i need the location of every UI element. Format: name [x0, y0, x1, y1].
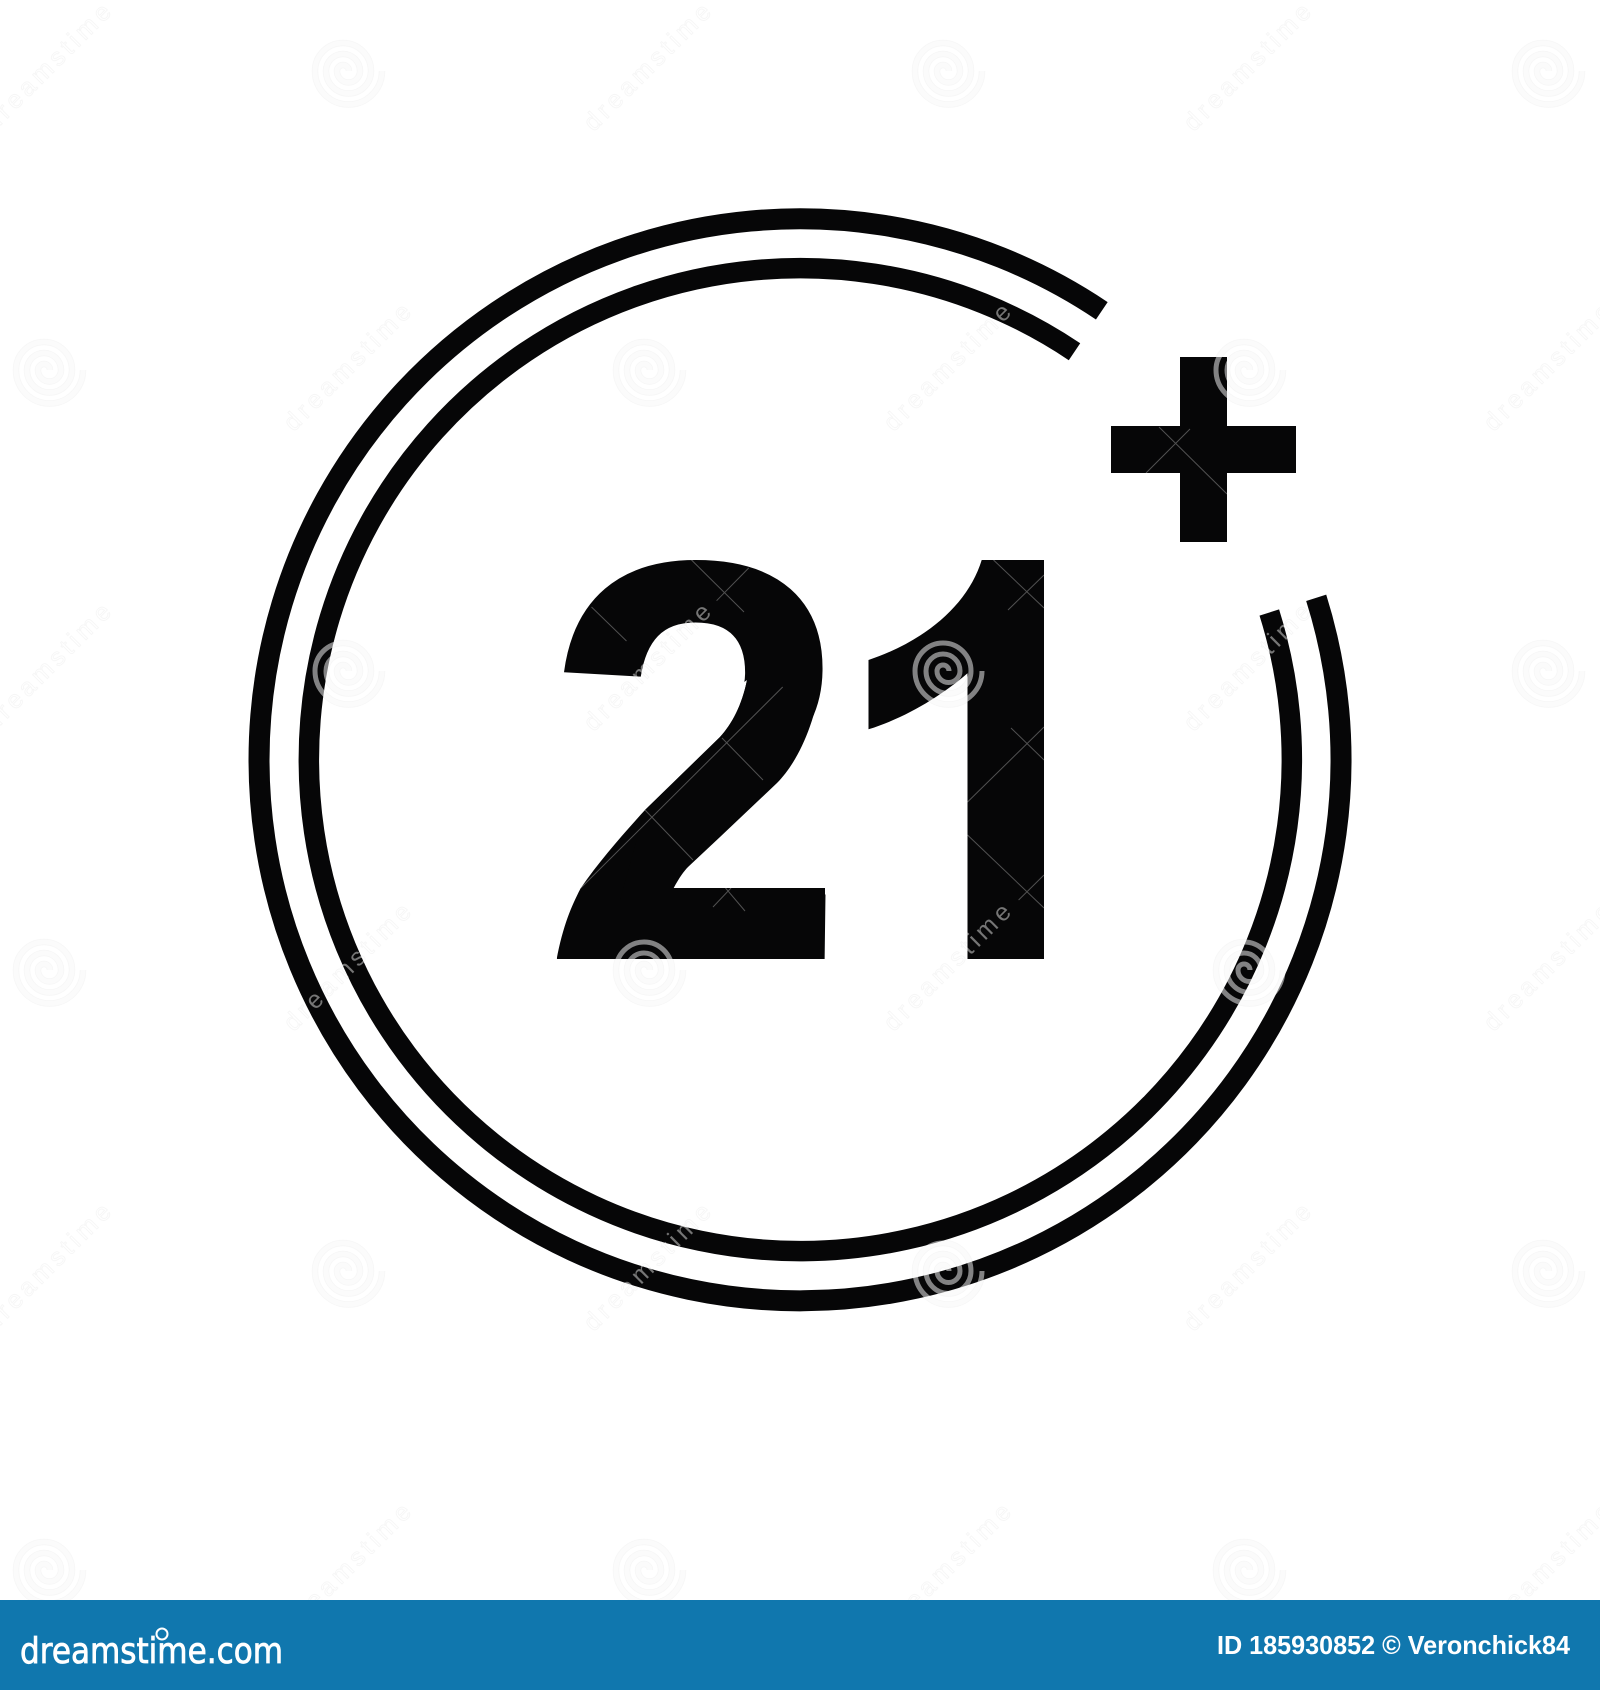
watermark text: dreamstime [578, 598, 717, 737]
watermark text: dreamstime [878, 298, 1017, 437]
watermark text: dreamstime [278, 1498, 417, 1637]
plus sign [1111, 357, 1296, 542]
watermark text: dreamstime [1178, 598, 1317, 737]
watermark text: dreamstime [1178, 0, 1317, 137]
number 21: 1 [831, 433, 1151, 1083]
watermark text: dreamstime [878, 1498, 1017, 1637]
watermark text: dreamstime [278, 298, 417, 437]
watermark text: dreamstime [878, 898, 1017, 1037]
inner ring [309, 268, 1292, 1251]
footer logo: dreamstime.com [20, 1631, 283, 1672]
watermark text: dreamstime [278, 898, 417, 1037]
footer image id and credit: ID 185930852 © Veronchick84 [1217, 1630, 1571, 1660]
footer bar [0, 1600, 1600, 1690]
outer ring [259, 219, 1341, 1301]
number 21: 2 [536, 443, 854, 1081]
watermark hairlines [581, 427, 1227, 911]
watermark text: dreamstime [578, 1198, 717, 1337]
number 21 [536, 433, 1151, 1083]
watermark text: dreamstime [1178, 1198, 1317, 1337]
watermark text: dreamstime [578, 0, 717, 137]
